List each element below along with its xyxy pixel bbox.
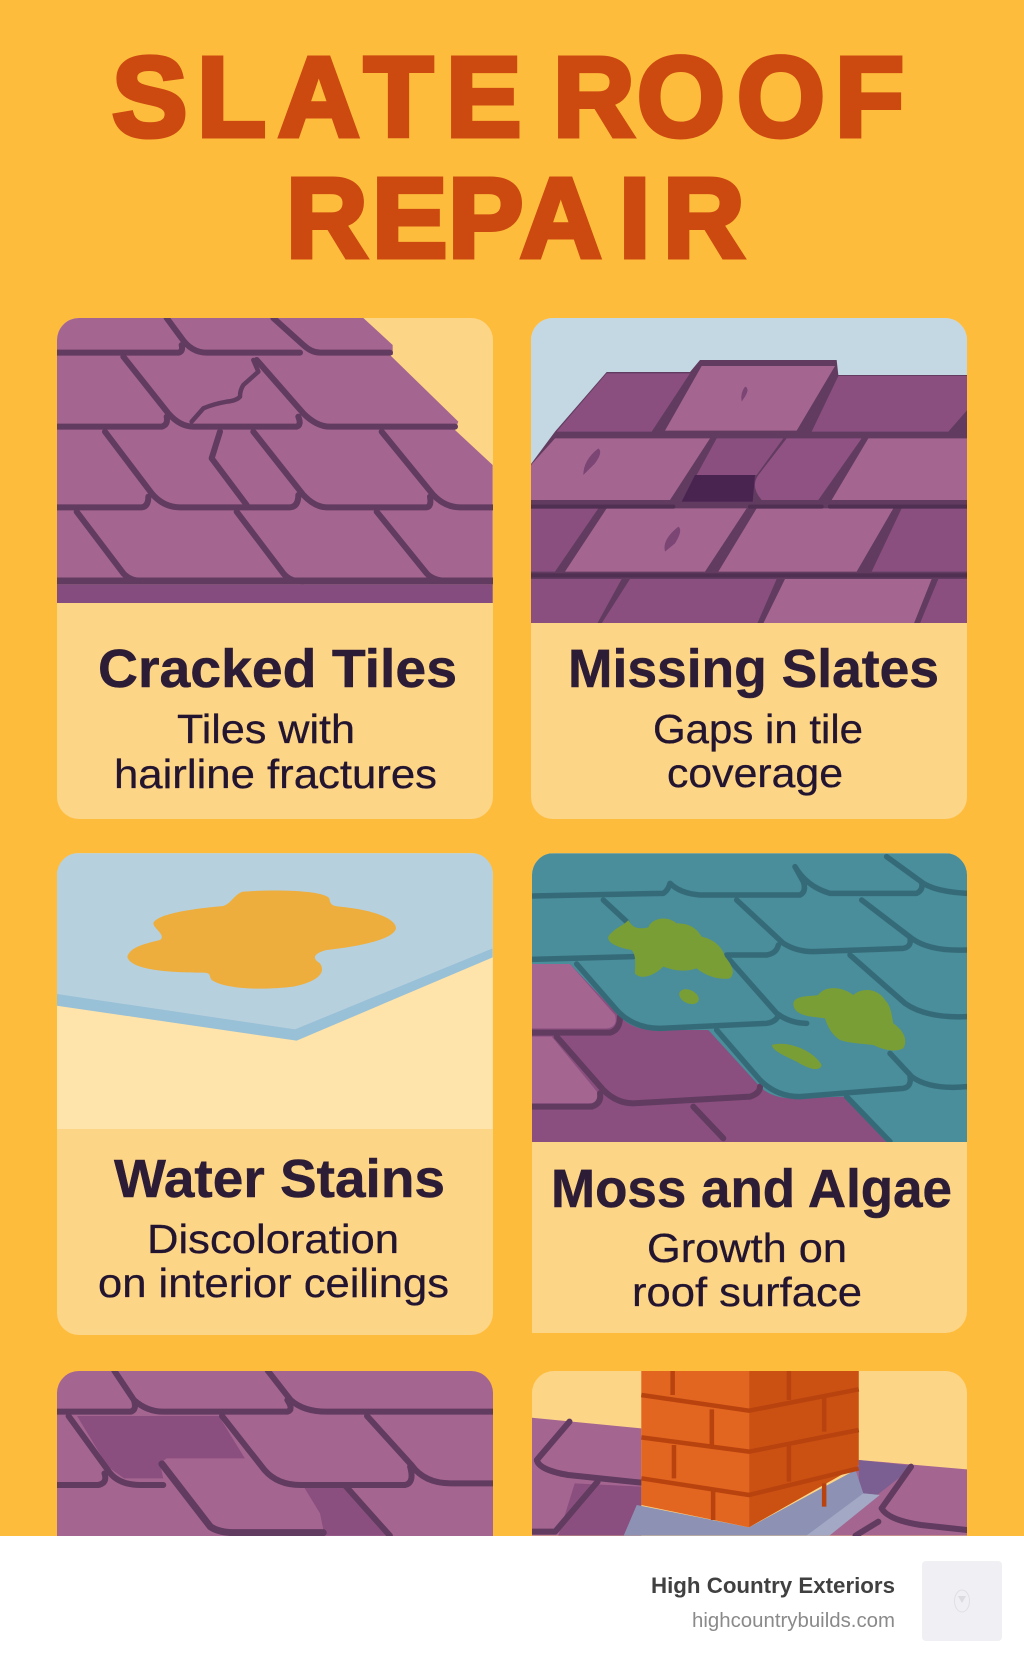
description: missing slates bbox=[653, 706, 863, 796]
description: water stains: on interior ceilings bbox=[98, 1260, 449, 1306]
heading: missing slates: Missing Slates bbox=[568, 639, 939, 699]
panel: missing slates bbox=[531, 318, 967, 819]
title bbox=[112, 34, 904, 281]
panel: moss and algae bbox=[532, 853, 967, 1333]
illustration: stained ceiling bbox=[57, 853, 493, 1129]
description: moss and algae bbox=[632, 1225, 862, 1315]
description: water stains: Discoloration bbox=[147, 1216, 399, 1262]
footer bbox=[0, 1536, 1024, 1666]
description: water stains bbox=[98, 1216, 449, 1306]
description: moss and algae: Growth on bbox=[647, 1225, 847, 1271]
panel: chimney flashing bbox=[532, 1371, 967, 1536]
chimney bbox=[641, 1371, 859, 1527]
brand name: High Country Exteriors bbox=[651, 1573, 895, 1598]
illustration: missing slate in roof bbox=[531, 318, 967, 623]
title: REPAIR bbox=[286, 155, 745, 281]
description: cracked tiles: Tiles with bbox=[177, 706, 355, 752]
panel: cracked tiles bbox=[57, 318, 493, 819]
description: missing slates: coverage bbox=[667, 750, 843, 796]
panel: slipped tile bbox=[57, 1371, 493, 1536]
heading: cracked tiles: Cracked Tiles bbox=[98, 639, 457, 699]
title: SLATE ROOF bbox=[112, 34, 904, 160]
heading: water stains: Water Stains bbox=[114, 1149, 445, 1209]
panel: water stains bbox=[57, 853, 493, 1335]
description: missing slates: Gaps in tile bbox=[653, 706, 863, 752]
description: cracked tiles: hairline fractures bbox=[114, 751, 437, 797]
moss patches bbox=[608, 919, 905, 1069]
illustration: moss on roof bbox=[532, 853, 967, 1142]
description: cracked tiles bbox=[114, 706, 437, 797]
heading: moss and algae: Moss and Algae bbox=[551, 1159, 952, 1219]
description: moss and algae: roof surface bbox=[632, 1269, 862, 1315]
illustration: cracked roof tiles bbox=[57, 318, 493, 603]
website: highcountrybuilds.com bbox=[692, 1610, 895, 1632]
logo placeholder bbox=[922, 1561, 1002, 1641]
